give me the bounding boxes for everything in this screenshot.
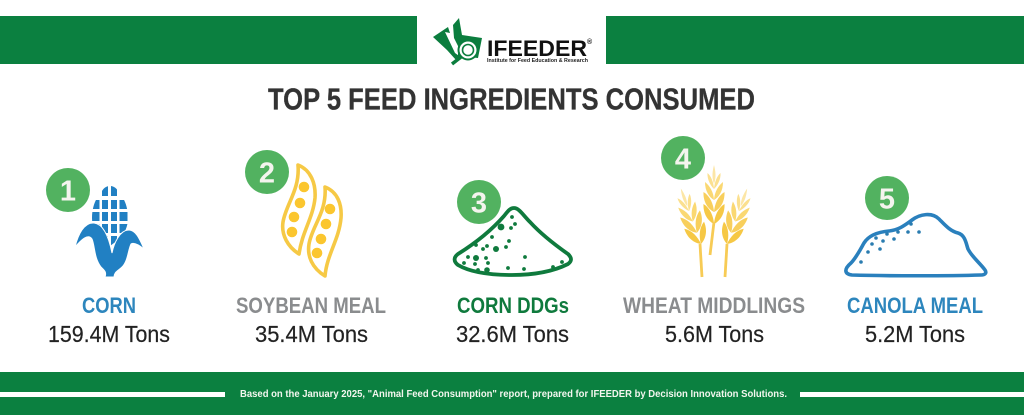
title: TOP 5 FEED INGREDIENTS CONSUMED xyxy=(268,82,755,116)
value: soybean meal: 35.4M Tons xyxy=(255,321,368,347)
number badge 5 xyxy=(865,176,909,220)
icon: canola meal pile xyxy=(846,215,986,276)
number badge 1 xyxy=(46,168,90,212)
number badge 2: 2 xyxy=(259,158,275,190)
logo wordmark: IFEEDER xyxy=(487,36,587,61)
panel: wheat middlings xyxy=(623,136,805,347)
number badge 3: 3 xyxy=(471,188,487,220)
header band right xyxy=(606,16,1024,64)
footer band xyxy=(0,372,1024,415)
panel: canola meal xyxy=(846,176,986,347)
number badge 3 xyxy=(457,180,501,224)
number badge 1: 1 xyxy=(60,176,76,208)
label: corn DDGs: CORN DDGs xyxy=(457,293,569,318)
icon: wheat xyxy=(671,165,757,277)
value: corn DDGs: 32.6M Tons xyxy=(456,321,569,347)
value: corn: 159.4M Tons xyxy=(48,321,170,347)
panel: corn xyxy=(46,168,170,347)
icon: soybean pods xyxy=(283,165,341,276)
label: soybean meal: SOYBEAN MEAL xyxy=(236,293,386,318)
label: wheat middlings: WHEAT MIDDLINGS xyxy=(623,293,805,318)
number badge 2 xyxy=(245,150,289,194)
value: wheat middlings: 5.6M Tons xyxy=(665,321,764,347)
registered mark: ® xyxy=(587,38,593,46)
header band left xyxy=(0,16,417,64)
panel: soybean meal xyxy=(236,150,386,347)
logo tagline: Institute for Feed Education & Research xyxy=(487,58,589,64)
IFEEDER logo xyxy=(433,18,593,64)
number badge 4: 4 xyxy=(675,144,691,176)
icon: corn xyxy=(75,186,144,277)
number badge 4 xyxy=(661,136,705,180)
label: corn: CORN xyxy=(82,293,136,318)
label: canola meal: CANOLA MEAL xyxy=(847,293,983,318)
number badge 5: 5 xyxy=(879,184,895,216)
value: canola meal: 5.2M Tons xyxy=(865,321,965,347)
panel: corn DDGs xyxy=(455,180,571,347)
source note: Based on the January 2025, "Animal Feed Consumption" report, prepared for IFEEDER by Decision Innovation Solutions. xyxy=(240,389,787,400)
icon: DDG pile xyxy=(455,208,571,275)
icon: logo leaf and magnifier xyxy=(433,18,482,64)
